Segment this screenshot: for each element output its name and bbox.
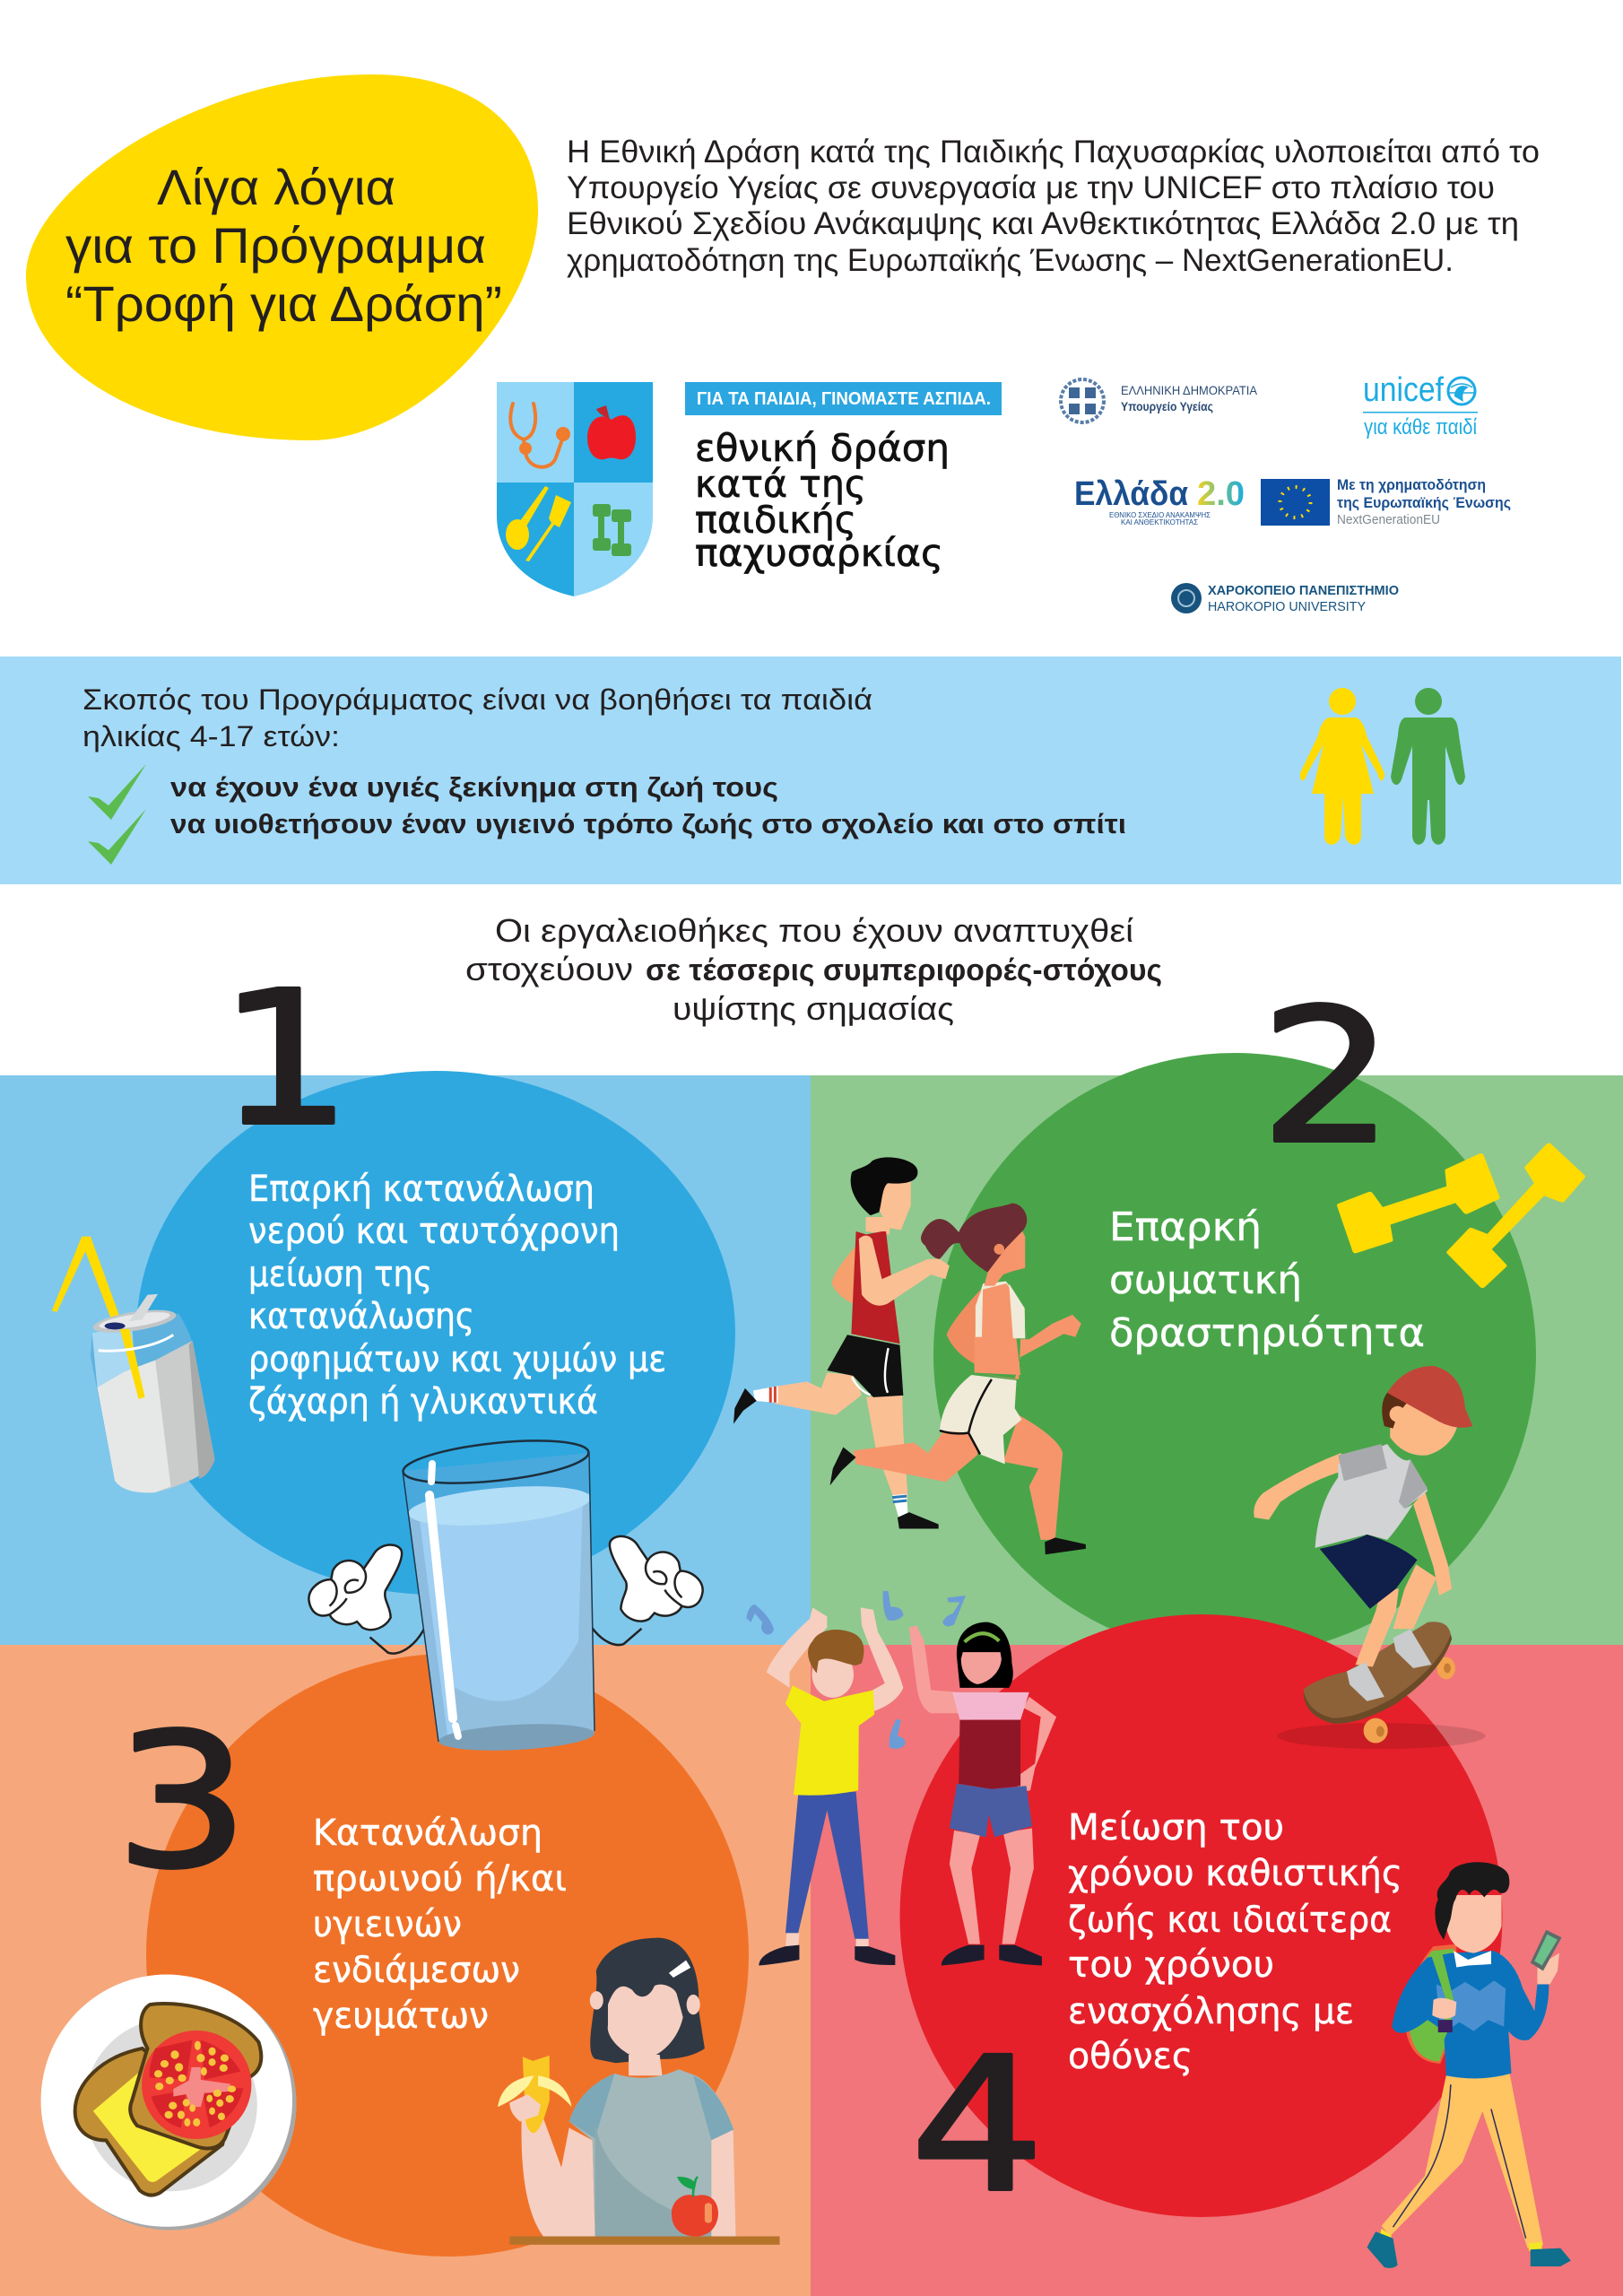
header: yellow blob with title: Λίγα λόγια	[157, 159, 395, 215]
panel: program goal band	[0, 657, 1621, 884]
circle: behaviour 4	[900, 1614, 1503, 2217]
hand: right glove	[582, 1536, 703, 1645]
panel: behaviour 4 background	[811, 1645, 1623, 2296]
illustration: male runner	[733, 1157, 950, 1528]
logo: unicef: για κάθε παιδί	[1364, 415, 1478, 439]
number 4: 4	[910, 2018, 1045, 2233]
logo: Harokopio University: HAROKOPIO UNIVERSITY	[1208, 599, 1366, 614]
text: behaviour 4	[1068, 1807, 1402, 2077]
icon: spoon and spatula	[506, 486, 571, 561]
intro paragraph	[567, 135, 1540, 278]
logo: national action shield	[497, 382, 653, 596]
logo: Greece 2.0: 2.0	[1197, 475, 1245, 513]
logo: national action wordmark: εθνική δράση	[695, 426, 950, 470]
logo: unicef: unicef	[1363, 371, 1444, 409]
logo: national action wordmark: ΓΙΑ ΤΑ ΠΑΙΔΙΑ, ΓΙΝΟΜΑΣΤΕ ΑΣΠΙΔΑ.	[697, 389, 991, 409]
text: behaviour 3: γευμάτων	[313, 1996, 489, 2037]
heading: four target behaviours	[465, 912, 1162, 1027]
text: behaviour 4: Μείωση του	[1068, 1807, 1284, 1848]
text: behaviour 1: νερού και ταυτόχρονη	[248, 1211, 620, 1252]
number 2: 2	[1260, 970, 1394, 1185]
goal heading text: Σκοπός του Προγράμματος είναι να βοηθήσει τα παιδιά	[82, 683, 872, 716]
illustration: skateboarder	[1254, 1366, 1486, 1749]
text: behaviour 4: χρόνου καθιστικής	[1068, 1853, 1402, 1894]
icon: yellow dumbbells	[1340, 1145, 1583, 1286]
text: behaviour 4: οθόνες	[1068, 2036, 1193, 2077]
intro paragraph: Εθνικού Σχεδίου Ανάκαμψης και Ανθεκτικότητας Ελλάδα 2.0 με τη	[567, 206, 1519, 241]
illustration: dancing boy	[759, 1607, 903, 1966]
logo: EU funding	[1261, 476, 1511, 527]
logo: unicef	[1363, 371, 1478, 439]
heading: four target behaviours: σε τέσσερις συμπεριφορές-στόχους	[646, 953, 1162, 987]
header: yellow blob with title: για το Πρόγραμμα	[65, 217, 486, 274]
logo: national action wordmark	[685, 382, 1002, 575]
goal heading text: ηλικίας 4-17 ετών:	[82, 720, 340, 752]
intro paragraph: χρηματοδότηση της Ευρωπαϊκής Ένωσης – NextGenerationEU.	[567, 243, 1454, 278]
text: behaviour 4: του χρόνου	[1068, 1944, 1274, 1986]
logo: EU funding: της Ευρωπαϊκής Ένωσης	[1337, 494, 1511, 511]
logo: Greece 2.0	[1074, 475, 1245, 526]
illustration: boy with phone and backpack	[1367, 1862, 1571, 2268]
panel: behaviour 3 background	[0, 1645, 811, 2296]
icon: glass of water with thumbs up	[308, 1433, 703, 1754]
heading: four target behaviours: υψίστης σημασίας	[673, 990, 954, 1027]
icon: apple	[587, 405, 636, 459]
goal bullets	[170, 771, 1126, 839]
intro paragraph: Η Εθνική Δράση κατά της Παιδικής Παχυσαρκίας υλοποιείται από το	[567, 135, 1540, 170]
number 1: 1	[218, 952, 352, 1167]
circle: behaviour 1	[136, 1071, 735, 1595]
icon: stethoscope	[510, 404, 568, 467]
heading: four target behaviours: Οι εργαλειοθήκες που έχουν αναπτυχθεί	[495, 912, 1133, 949]
text: behaviour 1: Επαρκή κατανάλωση	[248, 1169, 595, 1210]
icon: sugar-filled soda can with straw	[52, 1237, 214, 1492]
hand: left glove	[308, 1544, 430, 1654]
heading: four target behaviours: στοχεύουν	[465, 951, 633, 987]
illustration: female runner	[830, 1204, 1086, 1554]
logo: Greek Ministry of Health: Υπουργείο Υγείας	[1121, 399, 1213, 413]
logo: Harokopio University: ΧΑΡΟΚΟΠΕΙΟ ΠΑΝΕΠΙΣΤΗΜΙΟ	[1208, 583, 1399, 598]
text: behaviour 3: υγιεινών	[313, 1904, 462, 1945]
icon: check marks	[88, 764, 146, 865]
goal bullets: να υιοθετήσουν έναν υγιεινό τρόπο ζωής στο σχολείο και στο σπίτι	[170, 808, 1126, 839]
header: yellow blob with title: “Τροφή για Δράση”	[65, 275, 502, 332]
text: behaviour 1	[248, 1169, 666, 1422]
text: behaviour 1: ροφημάτων και χυμών με	[248, 1339, 666, 1380]
illustration: dancing girl	[909, 1622, 1056, 1966]
text: behaviour 1: μείωση της	[248, 1254, 432, 1295]
header: yellow blob with title	[26, 74, 538, 440]
icon: dumbbells	[593, 504, 631, 556]
logo: Greece 2.0: ΕΘΝΙΚΟ ΣΧΕΔΙΟ ΑΝΑΚΑΜΨΗΣ	[1109, 511, 1211, 519]
illustration: girl eating banana with apple	[498, 1938, 780, 2245]
goal heading text	[82, 683, 872, 752]
icon: toast on plate	[41, 1975, 297, 2230]
number 3: 3	[115, 1694, 249, 1909]
text: behaviour 3: πρωινού ή/και	[313, 1858, 567, 1900]
text: behaviour 1: κατανάλωσης	[248, 1296, 474, 1337]
text: behaviour 3	[313, 1813, 567, 2037]
circle: behaviour 2	[933, 1053, 1536, 1656]
logo: national action wordmark: παχυσαρκίας	[695, 531, 943, 575]
text: behaviour 4: ενασχόλησης με	[1068, 1991, 1354, 2032]
panel: behaviour 2 background	[811, 1075, 1623, 1645]
logo: Greek Ministry of Health	[1061, 379, 1258, 422]
icon: music notes	[746, 1591, 966, 1749]
logo: EU funding: Με τη χρηματοδότηση	[1337, 476, 1486, 493]
logo: EU funding: NextGenerationEU	[1337, 512, 1440, 527]
text: behaviour 1: ζάχαρη ή γλυκαντικά	[248, 1381, 598, 1422]
text: behaviour 2: Επαρκή	[1109, 1205, 1262, 1250]
icon: girl figure	[1300, 688, 1384, 845]
logo: Greek Ministry of Health: ΕΛΛΗΝΙΚΗ ΔΗΜΟΚΡΑΤΙΑ	[1121, 383, 1258, 397]
circle: behaviour 3	[146, 1654, 749, 2257]
goal bullets: να έχουν ένα υγιές ξεκίνημα στη ζωή τους	[170, 771, 778, 803]
logo: Harokopio University	[1171, 583, 1399, 614]
logo: national action wordmark: κατά της	[695, 462, 866, 506]
panel: behaviour 1 background	[0, 1075, 811, 1645]
intro paragraph: Υπουργείο Υγείας σε συνεργασία με την UNICEF στο πλαίσιο του	[567, 170, 1495, 205]
text: behaviour 2	[1109, 1205, 1425, 1356]
logo: Greece 2.0: Ελλάδα	[1074, 475, 1188, 513]
logo: Greece 2.0: ΚΑΙ ΑΝΘΕΚΤΙΚΟΤΗΤΑΣ	[1121, 518, 1198, 526]
text: behaviour 2: σωματική	[1109, 1257, 1302, 1303]
text: behaviour 3: ενδιάμεσων	[313, 1950, 520, 1991]
icon: boy figure	[1391, 688, 1465, 845]
text: behaviour 3: Κατανάλωση	[313, 1813, 542, 1854]
text: behaviour 2: δραστηριότητα	[1109, 1310, 1425, 1356]
text: behaviour 4: ζωής και ιδιαίτερα	[1068, 1900, 1392, 1941]
logo: national action wordmark: παιδικής	[695, 498, 856, 542]
